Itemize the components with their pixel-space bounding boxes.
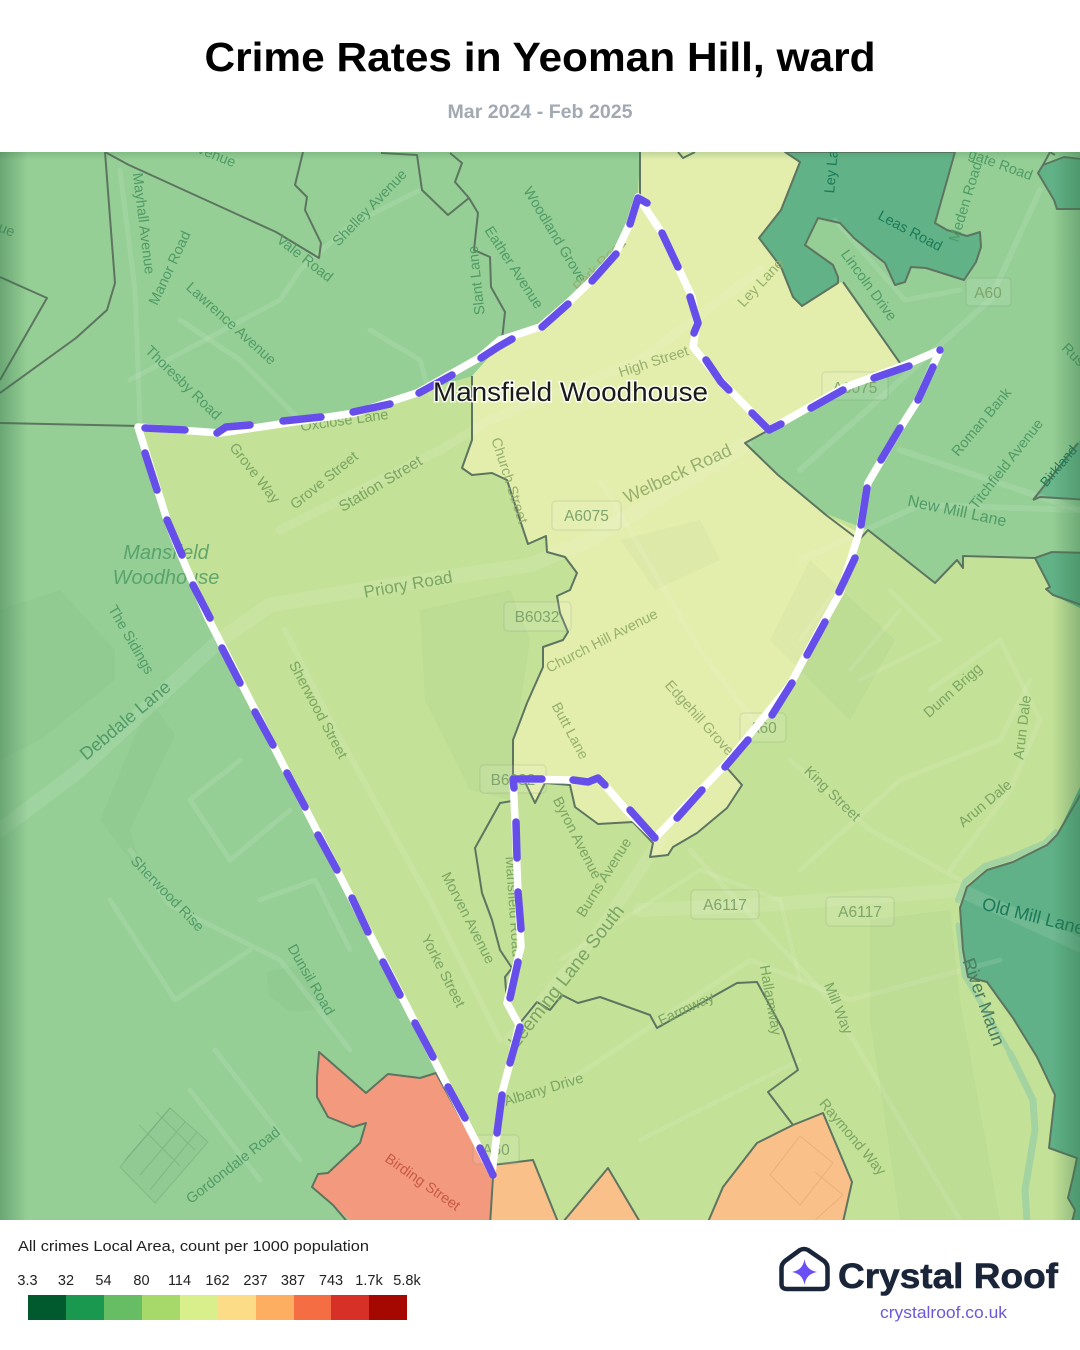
street labels on yellow-green: Burns Avenue [574, 835, 635, 920]
street labels on green areas: New Mill Lane [906, 493, 1008, 530]
shield: B6032 south [480, 765, 546, 793]
street labels on yellow-green: Grove Way [226, 440, 283, 507]
street labels on green areas: venue [195, 141, 238, 171]
shield: A60 south: A60 [482, 1142, 510, 1159]
street labels on green areas: Vale Road [273, 232, 336, 286]
logo: Crystal Roof [782, 1249, 1058, 1322]
place label: Mansfield Woodhouse: Mansfield Woodhouse [433, 377, 708, 407]
title: Crime Rates in Yeoman Hill, ward [204, 34, 876, 80]
street labels on yellow-green: Hallamway [756, 964, 784, 1037]
street labels on green areas: Manor Road [146, 229, 194, 308]
legend heading: All crimes Local Area, count per 1000 population [18, 1238, 369, 1255]
road network [0, 170, 1080, 1220]
street labels on yellow-green: Leeming Lane South [504, 901, 629, 1052]
street labels on green areas: The Sidings [104, 603, 157, 677]
street labels on green areas: Eather Avenue [481, 224, 546, 312]
legend values: 32 [58, 1273, 74, 1289]
street labels on green areas [0, 141, 1080, 1207]
shield: B6032 south: B6032 [491, 772, 535, 789]
legend values: 387 [281, 1273, 305, 1289]
label: Birding Street: Birding Street [382, 1151, 463, 1214]
region: pale yellow central area [462, 152, 900, 857]
shield: A60 north-east: A60 [974, 285, 1002, 302]
street labels on dark green [822, 148, 1080, 939]
street labels on pale area [487, 235, 787, 762]
street labels on yellow-green [226, 407, 1035, 1179]
region: dark green Birkland patch [1033, 440, 1080, 500]
street labels on pale area: High Street [617, 343, 691, 381]
street labels on green areas: Meden Road [946, 160, 986, 244]
shield: A6075 central [552, 501, 621, 530]
street labels on green areas: Woodhouse [113, 567, 219, 589]
street labels on pale area: Church Hill Avenue [544, 606, 661, 676]
street labels on green areas: Sherwood Rise [127, 853, 207, 935]
region: yellow-green south and west area [138, 376, 1080, 1220]
street labels on yellow-green: Priory Road [362, 567, 454, 602]
street labels on pale area: Butt Lane [548, 700, 591, 762]
region: red high-crime area [312, 1052, 493, 1220]
shield: A60 central [740, 713, 786, 742]
shield: A60 south [473, 1135, 519, 1164]
yeoman hill ward outline [138, 197, 940, 1175]
street labels on pale area: Welbeck Road [620, 440, 735, 507]
street labels on dark green: Ley La [822, 148, 842, 194]
street labels on pale area: Church Street [487, 436, 530, 526]
shield: A6075 east: A6075 [833, 380, 877, 397]
street labels on pale area: Park Road [570, 235, 630, 295]
street labels on yellow-green: King Street [800, 763, 863, 825]
park shading [0, 520, 1000, 1220]
street labels on yellow-green: Mill Way [820, 980, 856, 1037]
street labels on yellow-green: Byron Avenue [549, 794, 604, 882]
legend values [17, 1273, 421, 1289]
street labels on green areas: Mansfield [123, 542, 210, 564]
legend values: 1.7k [355, 1273, 383, 1289]
legend values: 80 [133, 1273, 150, 1289]
street labels on green areas: Slant Lane [465, 245, 489, 316]
street labels on green areas: Dunsil Road [284, 942, 337, 1018]
street labels on pale area: Edgehill Grove [661, 678, 737, 759]
region: dark green river side [960, 787, 1080, 1220]
street labels on green areas: Shelley Avenue [330, 167, 411, 250]
legend values: 237 [243, 1273, 268, 1289]
legend values: 162 [205, 1273, 230, 1289]
map edge shading [0, 152, 1080, 1220]
subtitle: date range: Mar 2024 - Feb 2025 [448, 102, 633, 123]
logo url: crystalroof.co.uk [880, 1304, 1008, 1322]
orange building outlines [770, 1136, 843, 1220]
street labels on yellow-green: Grove Street [288, 449, 361, 513]
region: orange area south [708, 1113, 852, 1220]
street labels on green areas: Roman Bank [949, 385, 1015, 460]
icon: house with star [782, 1249, 828, 1289]
street labels on yellow-green: Raymond Way [816, 1096, 889, 1179]
legend values: 5.8k [393, 1273, 421, 1289]
street labels on yellow-green: Arun Dale [1011, 695, 1035, 760]
shield: A60 north-east [966, 278, 1011, 306]
legend [17, 1238, 421, 1320]
street labels on dark green: Leas Road [875, 208, 945, 255]
street labels on green areas: Woodland Grove [520, 184, 589, 286]
sports pitch grid [120, 1108, 208, 1203]
street labels on green areas: Thoresby Road [142, 343, 224, 423]
shield: A6117 east [826, 897, 894, 926]
shield: A60 central: A60 [749, 720, 777, 737]
street labels on pale area: Ley Lane [735, 256, 787, 311]
street labels on green areas: Lincoln Drive [837, 247, 899, 324]
legend values: 743 [319, 1273, 343, 1289]
street labels on yellow-green: Mansfield Road [501, 856, 524, 958]
road shields [473, 278, 1011, 1164]
river maun [958, 832, 1056, 1222]
street labels on green areas: Debdale Lane [76, 677, 175, 764]
street labels on yellow-green: Arun Dale [956, 777, 1015, 831]
street labels on green areas: Gordondale Road [184, 1124, 284, 1207]
street labels on green areas: Lawrence Avenue [183, 280, 279, 368]
street labels on yellow-green: Dunn Brigg [921, 661, 986, 721]
street labels on green areas: Mayhall Avenue [129, 172, 157, 275]
region: dark green north block [759, 152, 981, 306]
region: dark green east patch [1035, 552, 1080, 608]
street labels on dark green: Birkland [1037, 443, 1080, 490]
street labels on yellow-green: Albany Drive [502, 1071, 585, 1110]
region: orange triangle [563, 1168, 640, 1220]
street labels on green areas: Titchfield Avenue [967, 416, 1047, 513]
shield: A6117 west [691, 890, 759, 919]
label: River Maun: River Maun [959, 955, 1009, 1049]
street labels on yellow-green: Sherwood Street [285, 659, 350, 762]
street labels on yellow-green: Morven Avenue [438, 870, 498, 967]
shield: A6117 west: A6117 [703, 897, 747, 914]
street labels on yellow-green: Yorke Street [417, 932, 468, 1010]
shield: A6117 east: A6117 [838, 904, 882, 921]
shield: A6075 east [822, 372, 888, 400]
street labels on yellow-green: Farmway [656, 989, 717, 1029]
shield: B6032: B6032 [515, 609, 559, 626]
legend colour scale [28, 1295, 407, 1320]
street labels on yellow-green: Oxclose Lane [299, 407, 389, 435]
ward boundary lines [0, 152, 1080, 1225]
legend values: 114 [168, 1273, 191, 1289]
street labels on yellow-green: Station Street [336, 452, 426, 516]
logo wordmark: Crystal Roof [838, 1257, 1058, 1296]
region: orange area beside A60 [490, 1160, 558, 1220]
street labels on green areas: gate Road [966, 146, 1035, 184]
region: dark green north-east corner [1038, 157, 1080, 209]
legend values: 54 [95, 1273, 112, 1289]
shield: B6032 [504, 602, 571, 631]
legend values: 3.3 [17, 1273, 38, 1289]
shield: A6075 central: A6075 [564, 508, 609, 525]
